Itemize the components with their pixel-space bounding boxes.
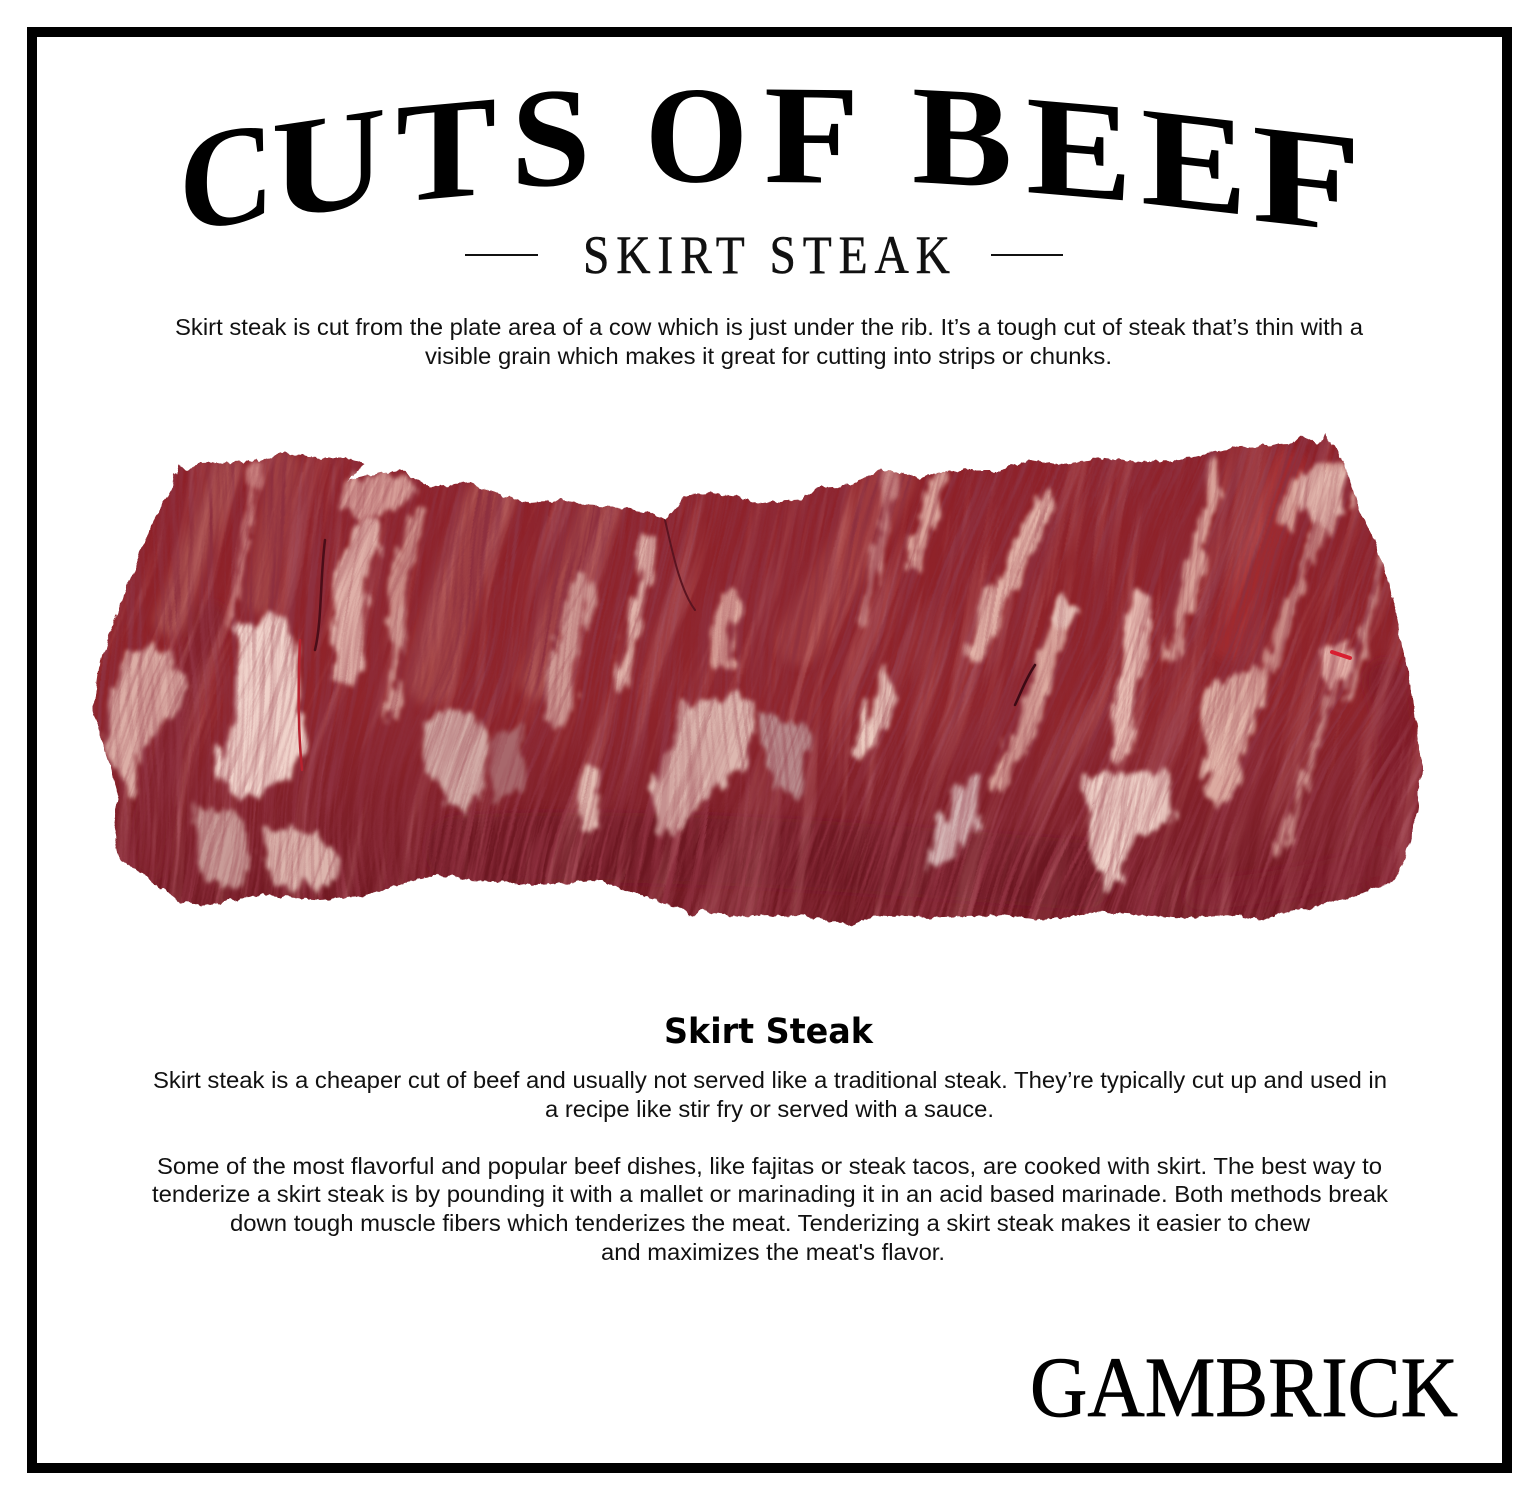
description paragraph two: down tough muscle fibers which tenderizes the meat. Tenderizing a skirt steak makes it easier to chew — [230, 1210, 1310, 1236]
meat: fat patches — [108, 470, 1352, 890]
intro text — [175, 314, 1364, 369]
meat: muscle fibre texture, middle section — [376, 482, 814, 918]
intro text: Skirt steak is cut from the plate area of a cow which is just under the rib. It’s a tough cut of steak that’s thin with a — [175, 314, 1364, 340]
title: cuts of beef: F — [1252, 95, 1362, 263]
section heading: skirt steak: Skirt Steak — [664, 1012, 874, 1052]
description paragraph two: and maximizes the meat's flavor. — [601, 1239, 945, 1265]
description paragraph two — [152, 1153, 1388, 1265]
description paragraph two: tenderize a skirt steak is by pounding it with a mallet or marinading it in an acid based marinade. Both methods break — [152, 1181, 1388, 1207]
meat: dark crevices and bright accents — [299, 520, 1350, 770]
subtitle: skirt steak: SKIRT STEAK — [583, 226, 950, 286]
description paragraph one: Skirt steak is a cheaper cut of beef and usually not served like a traditional steak. They’re typically cut up and used in — [153, 1067, 1387, 1093]
meat: broad tonal areas — [150, 465, 1398, 895]
title: cuts of beef: T — [396, 66, 496, 233]
photo: raw skirt steak — [92, 433, 1424, 926]
description paragraph one — [153, 1067, 1387, 1122]
meat: fine fibres over fat, left — [0, 161, 591, 1222]
brand logo: gambrick: GAMBRICK — [1030, 1339, 1458, 1435]
meat: fat streaks — [230, 470, 1382, 850]
description paragraph two: Some of the most flavorful and popular beef dishes, like fajitas or steak tacos, are cooked with skirt. The best way to — [157, 1153, 1382, 1179]
title: cuts of beef: F — [764, 57, 860, 214]
title: cuts of beef: O — [645, 58, 748, 213]
title: cuts of beef: S — [511, 57, 590, 218]
title: cuts of beef: E — [1141, 77, 1247, 246]
title: cuts of beef: E — [1026, 66, 1132, 232]
intro text: visible grain which makes it great for cutting into strips or chunks. — [425, 343, 1112, 369]
meat: muscle fibre texture, left section — [93, 452, 430, 906]
title: cuts of beef: B — [912, 56, 1012, 218]
title: cuts of beef: C — [179, 89, 274, 264]
title: cuts of beef — [179, 56, 1362, 264]
title: cuts of beef: U — [271, 76, 386, 250]
description paragraph one: a recipe like stir fry or served with a sauce. — [545, 1096, 994, 1122]
meat: muscle fibre texture, right section — [767, 434, 1423, 926]
meat: fine fibres over fat, right — [351, 0, 1536, 1469]
